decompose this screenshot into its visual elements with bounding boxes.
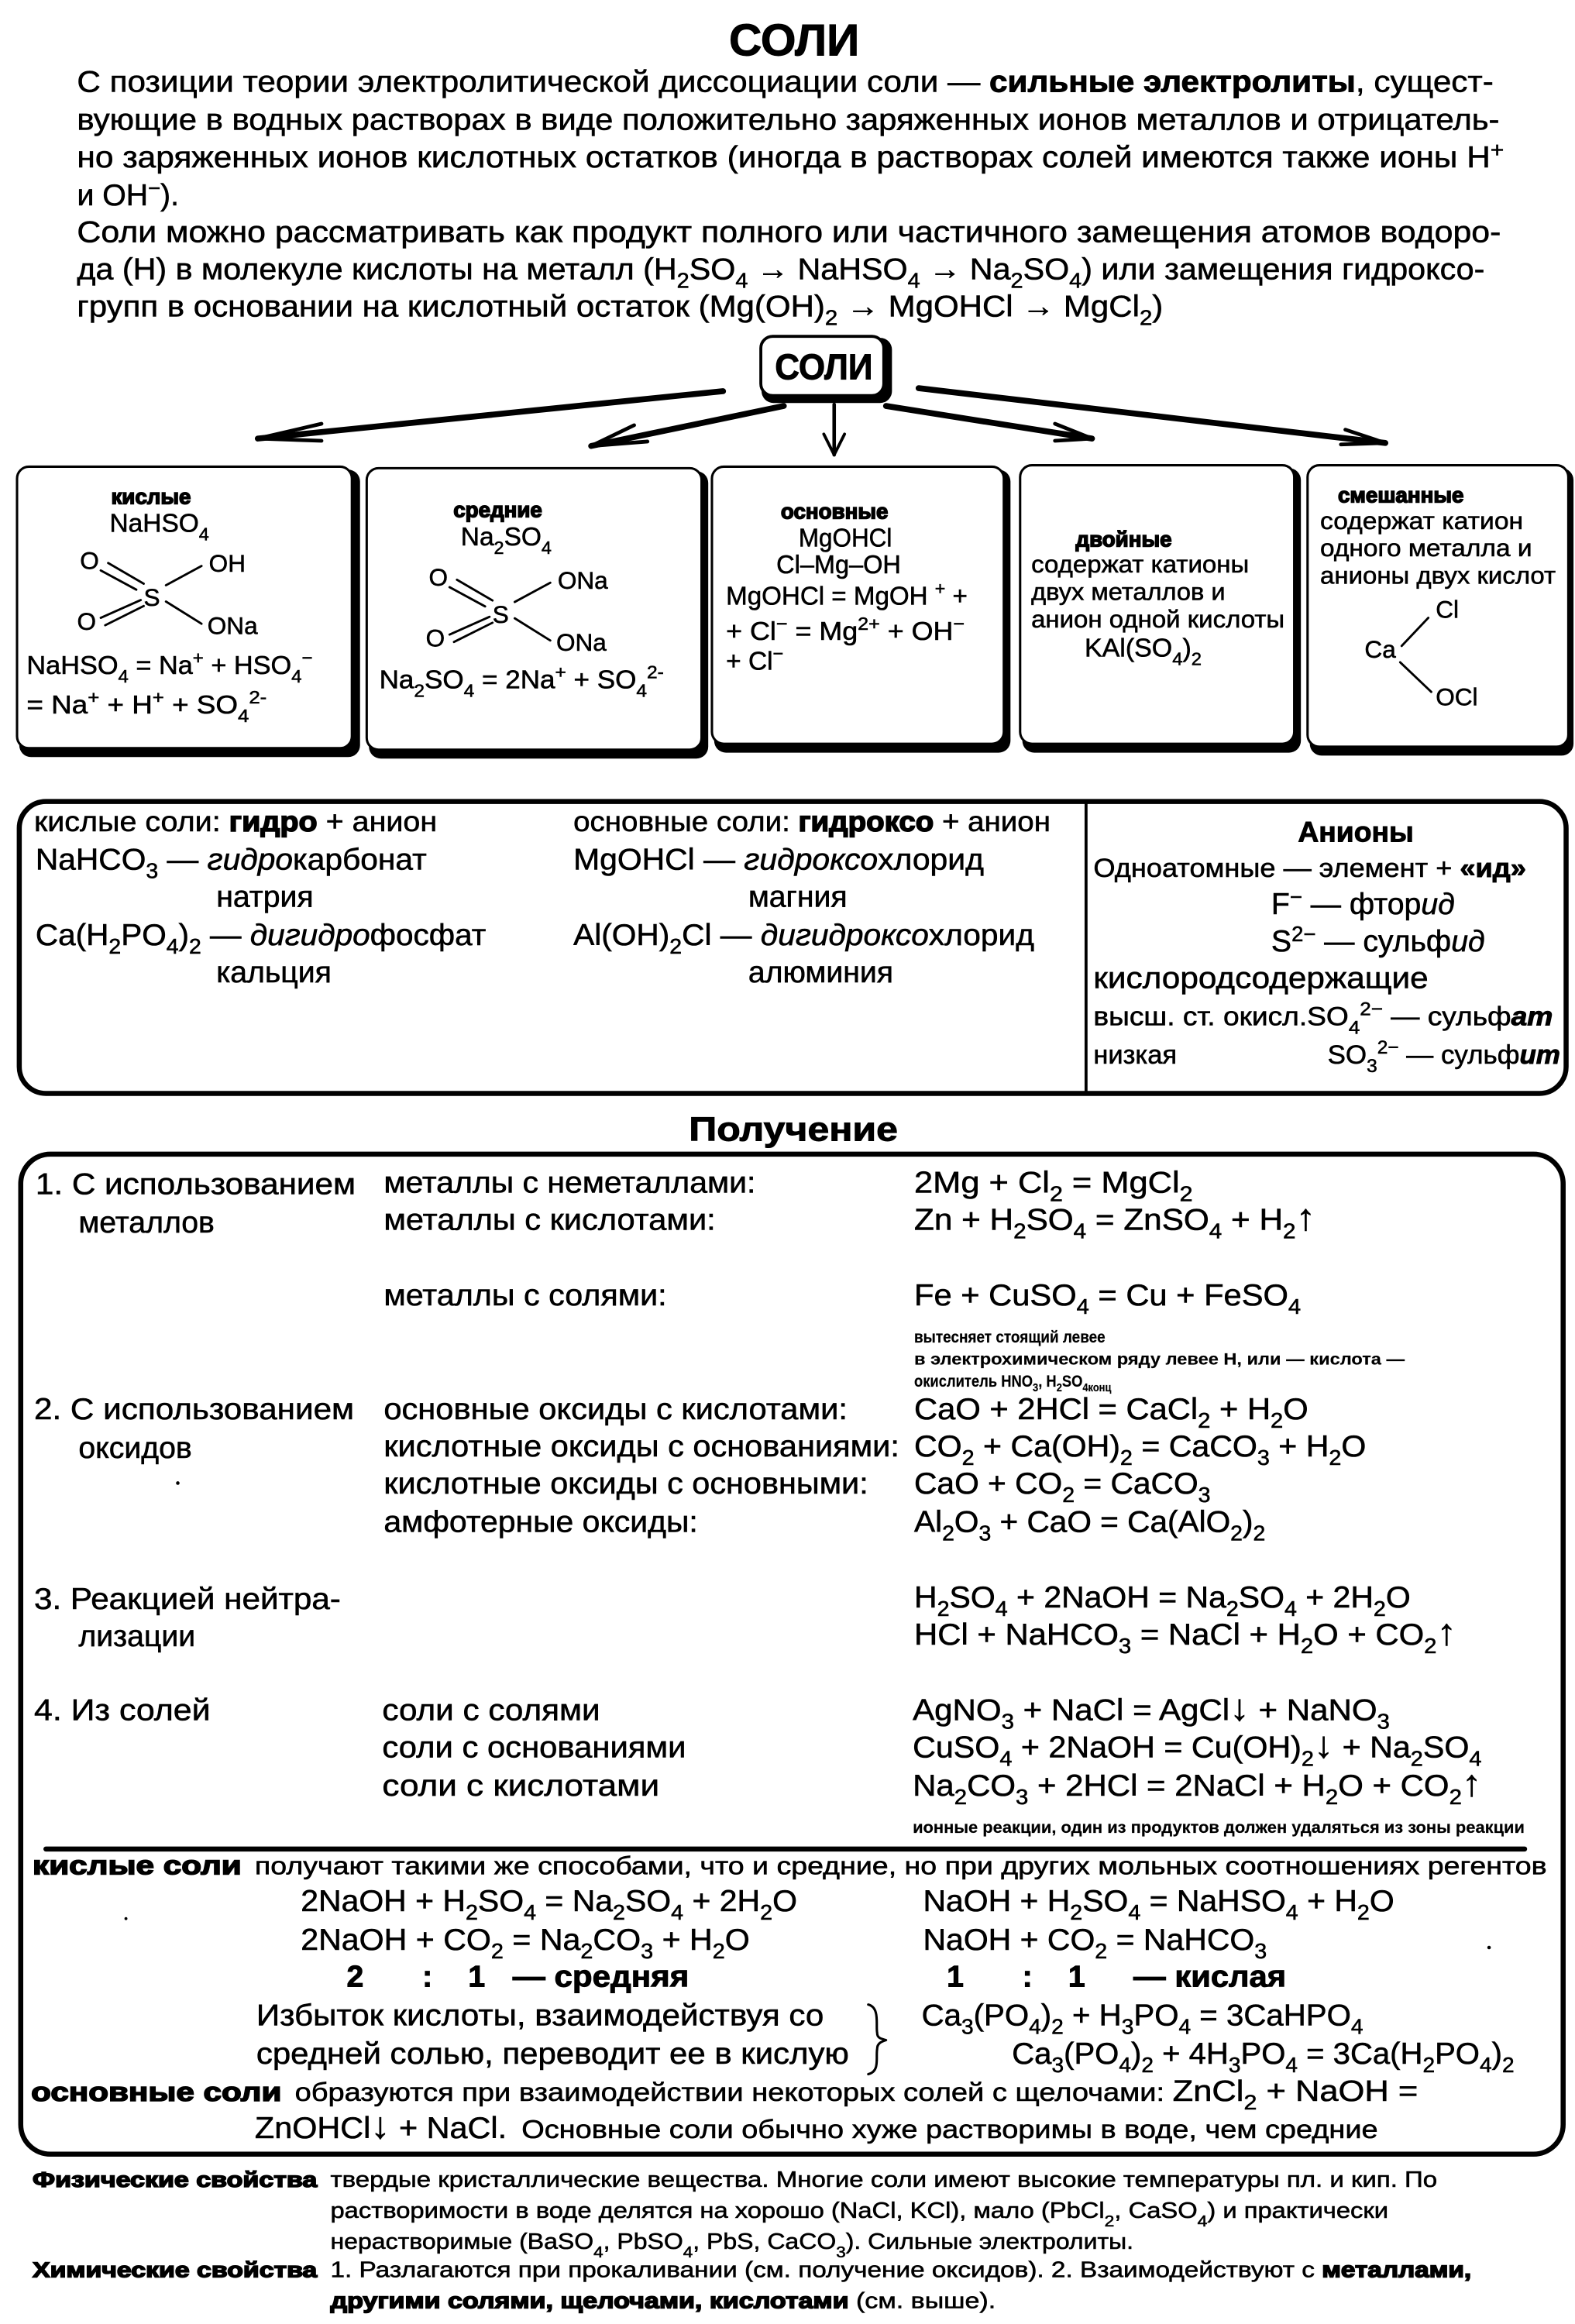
description: двойные bbox=[1031, 550, 1284, 633]
acid salts naming: NaHCO 3 — гидрокарбонат bbox=[36, 844, 427, 883]
chemical properties: другими солями, щелочами, кислотами (см. выше). bbox=[330, 2289, 996, 2314]
structure: NaHSO4: S bbox=[144, 583, 160, 611]
structure: NaHSO4: OH bbox=[209, 549, 246, 577]
structure: Na2SO4: ONa bbox=[556, 628, 607, 656]
acid salts preparation: — средняя bbox=[513, 1961, 689, 1994]
group 1: metals: окислитель HNO3, H2SO4конц bbox=[914, 1373, 1111, 1394]
group 3: neutralization: H2SO4 + 2NaOH = Na 2SO4 + 2H 2O bbox=[914, 1581, 1411, 1621]
acid salts preparation: : bbox=[1023, 1961, 1033, 1994]
acid salts preparation: NaOH + CO 2 = NaHCO 3 bbox=[923, 1923, 1267, 1963]
heading: получение: Получение bbox=[689, 1111, 898, 1149]
group 1: metals: Fe + CuSO 4 = Cu + FeSO 4 bbox=[914, 1279, 1301, 1318]
equation: second step: + Cl − = Mg 2+ + OH − bbox=[726, 614, 965, 646]
basic salts naming: MgOHCl — гидроксо хлорид bbox=[573, 844, 984, 877]
description: смешанные bbox=[1320, 507, 1556, 590]
acid salts preparation: Ca3(PO4)2 + 4H3PO4 = 3Ca(H2PO4)2 bbox=[1012, 2037, 1515, 2078]
physical properties: нерастворимые (BaSO 4, PbSO 4, PbS, CaCO 3). Сильные электролиты. bbox=[330, 2229, 1133, 2262]
anions column: высш. ст. окисл.SO 42− — сульф ат bbox=[1093, 999, 1553, 1039]
panel: смешанные bbox=[1308, 466, 1573, 755]
group 1: metals: 2Mg + Cl 2 = MgCl 2 bbox=[914, 1167, 1193, 1206]
group 1: metals: металлы с неметаллами: bbox=[383, 1167, 755, 1200]
formula: MgOHCl: MgOHCl bbox=[799, 524, 892, 553]
panel: основные bbox=[712, 466, 1010, 753]
group 4: salts bbox=[34, 1687, 1525, 1837]
group 2: oxides: амфотерные оксиды: bbox=[383, 1506, 698, 1539]
equation: dissociation second step: = Na + + H + + SO 42- bbox=[26, 687, 267, 726]
arrows from root to categories bbox=[258, 388, 1385, 455]
chemical properties: 1. Разлагаются при прокаливании (см. получение оксидов). 2. Взаимодействуют с металлами, bbox=[330, 2258, 1471, 2283]
anions column: кислородсодержащие bbox=[1093, 962, 1429, 995]
acid salts preparation: 2NaOH + CO 2 = Na 2CO3 + H 2O bbox=[301, 1923, 750, 1963]
group 2: oxides: основные оксиды с кислотами: bbox=[383, 1393, 848, 1426]
equation: dissociation: Na2SO4 = 2Na + + SO 42- bbox=[380, 662, 664, 701]
group 4: salts: соли с основаниями bbox=[382, 1731, 686, 1764]
formula: KAl(SO4)2: KAl(SO4)2 bbox=[1085, 634, 1202, 669]
group 2: oxides: кислотные оксиды с основаниями: bbox=[383, 1430, 899, 1463]
group 1: metals: вытесняет стоящий левее bbox=[914, 1329, 1106, 1346]
structure: CaOCl2: Cl bbox=[1436, 596, 1459, 624]
acid salts naming: кальция bbox=[216, 956, 332, 989]
structure: Na2SO4: S bbox=[493, 600, 509, 628]
group 2: oxides: 2. С использованием bbox=[34, 1393, 354, 1426]
intro text block: групп в основании на кислотный остаток (Mg(OH) 2 → MgOHCl → MgCl 2) bbox=[77, 290, 1163, 330]
description: двойные: двух металлов и bbox=[1031, 578, 1226, 606]
formula: NaHSO4: NaHSO4 bbox=[110, 510, 209, 545]
structure: Na2SO4: O bbox=[428, 563, 448, 591]
basic salts naming: алюминия bbox=[748, 956, 893, 989]
acid salts preparation: 1 bbox=[1068, 1961, 1085, 1994]
structure: NaHSO4: O bbox=[77, 607, 96, 635]
structure: CaOCl2: Ca bbox=[1364, 635, 1396, 663]
anions column: SO32− — сульфит bbox=[1328, 1037, 1560, 1078]
acid salts preparation bbox=[33, 1851, 1547, 2078]
basic salts preparation: Основные соли обычно хуже растворимы в воде, чем средние bbox=[521, 2116, 1378, 2144]
panel: средние bbox=[366, 468, 708, 758]
acid salts naming: Ca(H2PO4)2 — дигидрофосфат bbox=[36, 919, 486, 959]
structure: Na2SO4: O bbox=[426, 624, 445, 651]
description: двойные: анион одной кислоты bbox=[1031, 605, 1284, 633]
basic salts preparation: основные соли bbox=[31, 2078, 281, 2107]
structure: CaOCl2 bbox=[1364, 596, 1478, 710]
structure: NaHSO4: O bbox=[80, 546, 99, 574]
structure: CaOCl2: OCl bbox=[1436, 682, 1478, 710]
basic salts naming: магния bbox=[748, 880, 848, 913]
physical properties bbox=[33, 2168, 1437, 2262]
root node: соли: СОЛИ bbox=[775, 347, 872, 387]
acid salts preparation: средней солью, переводит ее в кислую bbox=[256, 2037, 849, 2071]
anions column: S2− — сульфид bbox=[1271, 921, 1485, 958]
physical properties: твердые кристаллические вещества. Многие соли имеют высокие температуры пл. и кип. По bbox=[330, 2168, 1437, 2192]
acid salts preparation: : bbox=[422, 1961, 432, 1994]
description: двойные: содержат катионы bbox=[1031, 550, 1249, 578]
group 2: oxides: CaO + CO 2 = CaCO 3 bbox=[914, 1467, 1211, 1507]
heading: двойные: двойные bbox=[1075, 528, 1172, 552]
anions column: Анионы bbox=[1298, 815, 1414, 847]
root node: соли bbox=[761, 336, 892, 403]
structure: Cl-Mg-OH: Cl–Mg–OH bbox=[776, 551, 901, 579]
physical properties: растворимости в воде делятся на хорошо (NaCl, KCl), мало (PbCl 2, CaSO 4) и практически bbox=[330, 2199, 1388, 2231]
group 1: metals: Zn + H 2SO 4 = ZnSO 4 + H 2↑ bbox=[914, 1197, 1315, 1243]
group 2: oxides: Al2O3 + CaO = Ca(AlO 2)2 bbox=[914, 1506, 1265, 1545]
intro text block: да (Н) в молекуле кислоты на металл (H 2SO4 → NaHSO 4 → Na 2SO4) или замещения гидроксо- bbox=[77, 253, 1484, 293]
acid salts preparation: 2 bbox=[347, 1961, 363, 1994]
basic salts preparation: ZnOHCl ↓ + NaCl. bbox=[255, 2106, 507, 2147]
group 4: salts: Na2CO 3 + 2HCl = 2NaCl + H 2O + CO 2↑ bbox=[913, 1763, 1482, 1809]
panel: nomenclature and anions bbox=[19, 802, 1566, 1093]
panel: кислые bbox=[17, 466, 360, 757]
group 2: oxides: кислотные оксиды с основными: bbox=[383, 1467, 868, 1501]
group 4: salts: соли с солями bbox=[382, 1693, 600, 1727]
basic salts preparation: образуются при взаимодействии некоторых солей с щелочами: ZnCl 2 + NaOH = bbox=[295, 2075, 1418, 2114]
acid salts preparation: — кислая bbox=[1133, 1961, 1286, 1994]
acid salts preparation: кислые соли bbox=[33, 1851, 242, 1880]
heading: средние: средние bbox=[453, 497, 542, 521]
group 1: metals: в электрохимическом ряду левее Н, или — кислота — bbox=[914, 1350, 1405, 1368]
group 1: metals bbox=[36, 1167, 1405, 1394]
acid salts preparation: 2NaOH + H 2SO4 = Na 2SO4 + 2H 2O bbox=[301, 1885, 797, 1925]
group 3: neutralization: HCl + NaHCO 3 = NaCl + H 2O + CO 2↑ bbox=[914, 1612, 1456, 1658]
structure: Na2SO4 bbox=[426, 563, 608, 656]
formula: Na2SO4: Na2SO4 bbox=[461, 523, 552, 558]
group 4: salts: соли с кислотами bbox=[382, 1769, 659, 1803]
description: смешанные: одного металла и bbox=[1320, 534, 1532, 562]
heading: основные: основные bbox=[781, 499, 888, 523]
physical properties: Физические свойства bbox=[33, 2168, 318, 2192]
acid salts naming: кислые соли: гидро + анион bbox=[34, 805, 437, 837]
acid salts preparation: 1 bbox=[947, 1961, 964, 1994]
description: смешанные: анионы двух кислот bbox=[1320, 562, 1556, 590]
acid salts preparation: Избыток кислоты, взаимодействуя со bbox=[256, 1999, 824, 2032]
description: смешанные: содержат катион bbox=[1320, 507, 1523, 535]
acid salts preparation: Ca3(PO4)2 + H3PO4 = 3CaHPO 4 bbox=[922, 1999, 1364, 2039]
intro text block bbox=[77, 66, 1504, 330]
group 1: metals: металлы с солями: bbox=[383, 1279, 667, 1312]
group 1: metals: металлов bbox=[78, 1206, 215, 1239]
acid salts naming bbox=[34, 805, 486, 989]
group 4: salts: 4. Из солей bbox=[34, 1693, 211, 1727]
title: СОЛИ bbox=[729, 16, 859, 66]
group 3: neutralization: лизации bbox=[78, 1620, 195, 1653]
acid salts preparation: NaOH + H 2SO4 = NaHSO 4 + H2O bbox=[923, 1885, 1394, 1925]
basic salts naming: Al(OH) 2Cl — дигидроксо хлорид bbox=[573, 919, 1034, 959]
panel: двойные bbox=[1020, 466, 1301, 753]
equation: dissociation: MgOHCl = MgOH + + bbox=[726, 578, 968, 610]
group 3: neutralization: 3. Реакцией нейтра- bbox=[34, 1583, 341, 1616]
group 2: oxides: CO2 + Ca(OH) 2 = CaCO 3 + H2O bbox=[914, 1430, 1366, 1470]
group 4: salts: ионные реакции, один из продуктов должен удаляться из зоны реакции bbox=[913, 1819, 1525, 1837]
acid salts naming: натрия bbox=[216, 880, 314, 913]
structure: NaHSO4 bbox=[77, 546, 258, 640]
basic salts preparation bbox=[31, 2075, 1418, 2147]
heading: смешанные: смешанные bbox=[1338, 483, 1463, 507]
equation: third step: + Cl− bbox=[726, 643, 783, 676]
group 2: oxides: CaO + 2HCl = CaCl 2 + H 2O bbox=[914, 1393, 1308, 1433]
group 4: salts: CuSO 4 + 2NaOH = Cu(OH) 2↓ + Na 2SO4 bbox=[913, 1724, 1482, 1771]
intro text block: и ОН−). bbox=[77, 176, 179, 212]
intro text block: С позиции теории электролитической диссоциации соли — сильные электролиты , сущест- bbox=[77, 66, 1494, 99]
acid salts preparation: 1 bbox=[468, 1961, 485, 1994]
group 1: metals: металлы с кислотами: bbox=[383, 1203, 716, 1236]
structure: NaHSO4: ONa bbox=[208, 612, 258, 640]
anions column bbox=[1093, 815, 1560, 1078]
group 2: oxides bbox=[34, 1393, 1366, 1545]
group 4: salts: AgNO 3 + NaCl = AgCl ↓ + NaNO 3 bbox=[913, 1687, 1390, 1734]
panel: получение bbox=[21, 1154, 1563, 2154]
group 1: metals: 1. С использованием bbox=[36, 1168, 356, 1202]
chemical properties bbox=[33, 2258, 1471, 2314]
acid salts preparation: получают такими же способами, что и средние, но при других мольных соотношениях регентов bbox=[255, 1851, 1547, 1879]
chemical properties: Химические свойства bbox=[33, 2258, 318, 2282]
group 3: neutralization bbox=[34, 1581, 1456, 1658]
intro text block: вующие в водных растворах в виде положительно заряженных ионов металлов и отрицатель- bbox=[77, 103, 1499, 136]
equation: dissociation: NaHSO4 = Na+ + HSO4− bbox=[26, 648, 313, 687]
group 2: oxides: оксидов bbox=[78, 1432, 192, 1465]
basic salts naming: основные соли: гидроксо + анион bbox=[573, 805, 1051, 837]
structure: Na2SO4: ONa bbox=[558, 566, 608, 594]
intro text block: Соли можно рассматривать как продукт полного или частичного замещения атомов водоро- bbox=[77, 216, 1501, 249]
anions column: F− — фторид bbox=[1271, 885, 1455, 921]
basic salts naming bbox=[573, 805, 1051, 989]
anions column: низкая bbox=[1093, 1040, 1177, 1070]
heading: кислые: кислые bbox=[111, 484, 191, 508]
intro text block: но заряженных ионов кислотных остатков (иногда в растворах солей имеются также ионы Н + bbox=[77, 138, 1504, 174]
anions column: Одноатомные — элемент + «ид» bbox=[1093, 854, 1526, 883]
